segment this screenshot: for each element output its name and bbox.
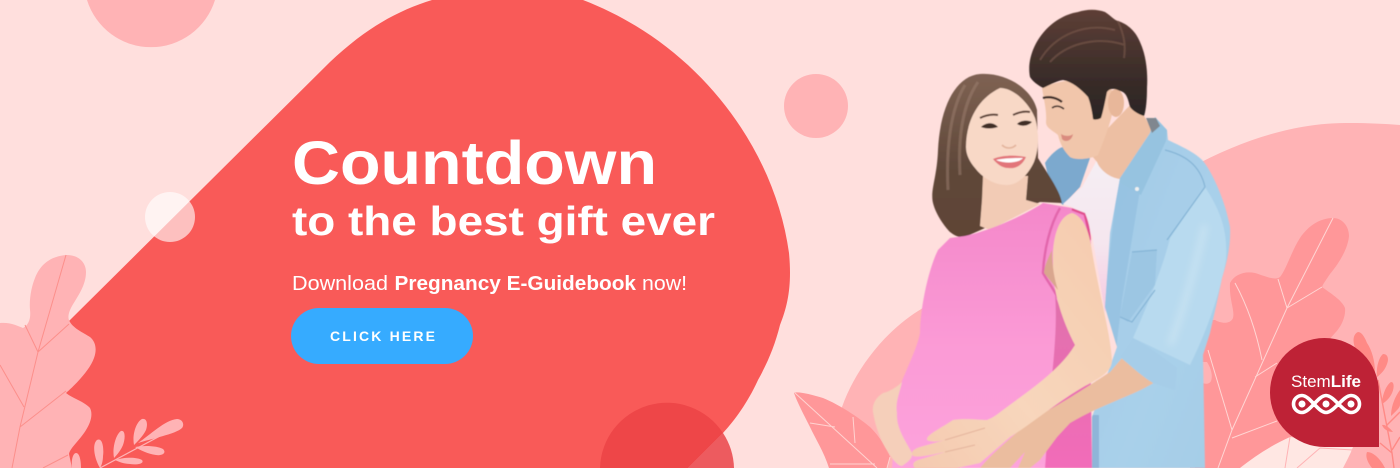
left sprig (72, 419, 183, 468)
logo infinity mark (1294, 396, 1360, 412)
button (291, 308, 473, 364)
collar button (1135, 187, 1139, 191)
sleeve highlight (1133, 187, 1226, 365)
right sprig leaves (1354, 332, 1400, 468)
woman's back hand (873, 382, 912, 466)
logo (1270, 338, 1379, 447)
man's eye (1052, 106, 1064, 109)
man's hair (1029, 10, 1147, 120)
dress details (1043, 208, 1095, 468)
finger lines (945, 428, 985, 452)
woman's lips (993, 156, 1026, 168)
pink leaf bottom center (794, 392, 890, 468)
dress (892, 203, 1092, 468)
dark circle on background side (688, 433, 734, 468)
leaf body (0, 255, 96, 468)
right sprig stem (1378, 380, 1400, 468)
man's hair streaks (1040, 21, 1125, 62)
red blob panel (0, 0, 790, 468)
sprig leaves (72, 419, 183, 468)
man's face (1042, 80, 1114, 159)
pocket shade (1120, 250, 1157, 322)
dark circle on blob side (600, 403, 723, 468)
collar flap (1118, 117, 1167, 195)
woman's hair (932, 74, 1062, 237)
logo wordmark: StemLife (1291, 373, 1361, 391)
button label: CLICK HERE (330, 328, 435, 344)
right oak leaf (1195, 218, 1349, 468)
man's ear (1108, 89, 1124, 117)
woman's eyes (981, 121, 1032, 128)
download word: Download (292, 273, 388, 295)
leaf veins (0, 255, 69, 468)
shirt details (1090, 117, 1226, 468)
man's brow (1043, 97, 1062, 102)
man's neck (1087, 100, 1152, 179)
armpit shade (1044, 250, 1058, 290)
right sprig (1354, 332, 1400, 468)
now: now! (642, 273, 687, 295)
shirt seams (1120, 150, 1205, 322)
subtitle: to the best gift ever (292, 198, 715, 244)
title: Countdown: Countdown (292, 129, 657, 197)
woman's teeth (996, 158, 1023, 162)
background lobe over right leaf (1200, 362, 1212, 384)
light corner shape (1240, 437, 1353, 468)
left oak leaf (0, 255, 96, 468)
man's shirt (1092, 117, 1230, 468)
woman's nose shade (1002, 145, 1016, 148)
woman's brows (980, 112, 1030, 118)
man's forearm and hand (980, 358, 1155, 468)
right leaf body (1195, 218, 1349, 468)
low pink blob behind woman (842, 308, 960, 468)
light corner shape and veins (1240, 437, 1353, 468)
photo: couple (873, 10, 1230, 468)
woman's face (966, 88, 1038, 185)
right large blob (1190, 123, 1400, 468)
infinity outline (1294, 396, 1360, 412)
woman's arm and hand (912, 213, 1112, 468)
light corner veins (1285, 437, 1353, 468)
dress back (1045, 295, 1095, 468)
woman's hair highlight (948, 82, 978, 190)
decorative circle: top (87, 0, 215, 47)
denim strip near woman's arm (1092, 414, 1099, 468)
sleeve edge (1043, 208, 1060, 298)
man's collar grey (1146, 118, 1160, 133)
sleeve glint (1172, 231, 1205, 340)
pink leaf body (794, 392, 890, 468)
man's t-shirt (1063, 160, 1123, 312)
woman's neck (980, 176, 1040, 230)
dark circle at blob base (600, 403, 734, 468)
man's mouth (1061, 134, 1073, 141)
button shape (291, 308, 473, 364)
man's left collar (1045, 147, 1090, 205)
download line (292, 273, 687, 295)
guidebook name: Pregnancy E-Guidebook (394, 273, 637, 295)
sprig stem (100, 428, 175, 468)
shirt placket shade (1105, 182, 1139, 344)
infinity dots (1299, 400, 1355, 408)
man's cuff (1120, 338, 1177, 390)
pink leaf veins (795, 393, 890, 468)
sleeve rim (1072, 209, 1091, 240)
translucent circle (145, 192, 195, 242)
right leaf veins (1208, 218, 1333, 468)
logo drop (1270, 338, 1379, 447)
decorative circle: right of blob (784, 74, 848, 138)
